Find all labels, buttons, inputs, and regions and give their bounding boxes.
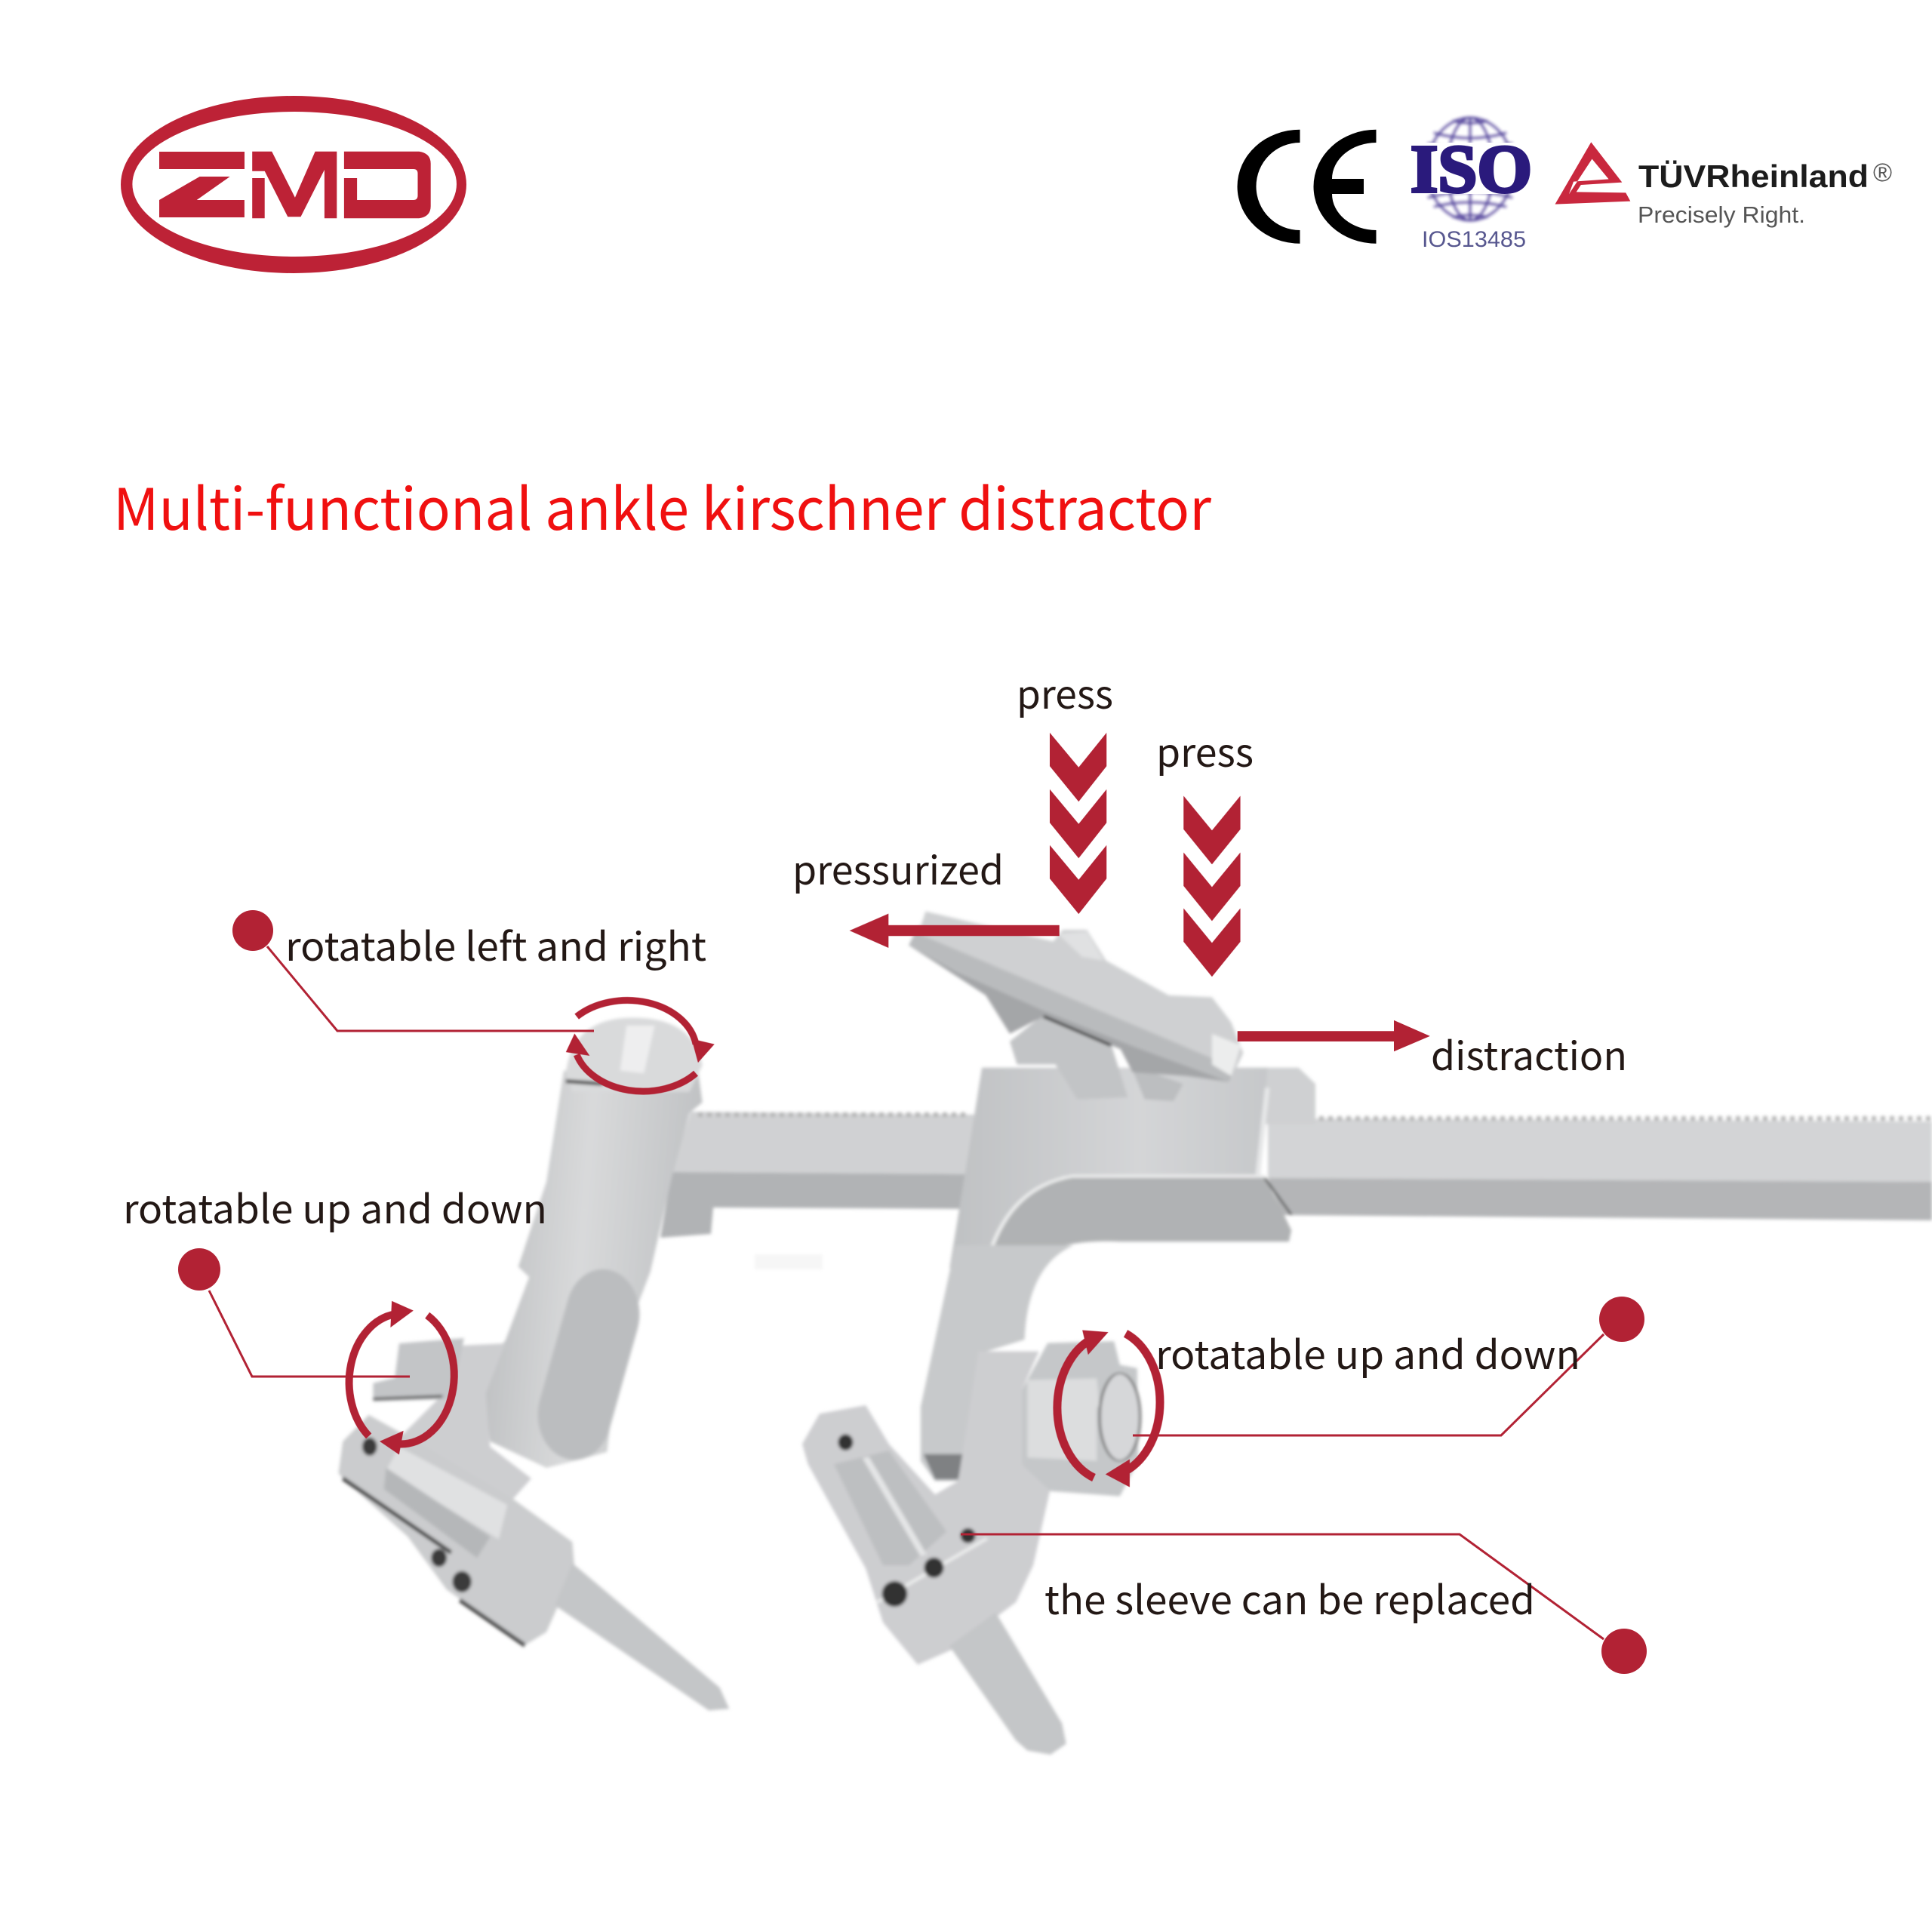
label: press (right): press — [1156, 721, 1254, 778]
label: pressurized: pressurized — [792, 839, 1004, 896]
callout: the sleeve can be replaced — [961, 1534, 1647, 1674]
rotation arrows: right knob — [1057, 1330, 1160, 1487]
press chevrons: right column — [1183, 795, 1241, 977]
slider body with arm — [949, 1068, 1315, 1268]
callout: rotatable left and right: rotatable left and right — [285, 915, 706, 972]
rotation arrows: lower left clamp — [349, 1301, 454, 1454]
left column and clamp — [338, 1017, 729, 1710]
arrow: distraction — [1238, 1020, 1430, 1051]
certification: ISO 13485: IOS13485 — [1422, 227, 1526, 252]
callout: rotatable up and down, right — [1133, 1297, 1644, 1435]
rotation arrows: top left knob — [566, 1001, 715, 1091]
callout: rotatable left and right — [232, 910, 706, 1031]
handle plate — [909, 912, 1243, 1101]
callout: rotatable up and down, left: rotatable up and down — [123, 1178, 547, 1235]
rack bar — [660, 1112, 1932, 1269]
arrow: pressurized — [850, 914, 1060, 948]
product photo: distractor device — [338, 912, 1932, 1755]
certification: ISO 13485 — [1404, 118, 1540, 252]
certification: TÜV Rheinland — [1555, 142, 1892, 228]
label: distraction: distraction — [1431, 1025, 1627, 1081]
certification: TÜV Rheinland: Precisely Right. — [1638, 202, 1805, 228]
callout: the sleeve can be replaced: the sleeve can be replaced — [1044, 1569, 1535, 1626]
press chevrons: left column — [1050, 733, 1106, 914]
logo: ZMD — [121, 96, 466, 273]
label: press (left): press — [1017, 663, 1113, 720]
certification: TÜV Rheinland: TÜVRheinland — [1638, 158, 1869, 194]
callout: rotatable up and down, right: rotatable up and down — [1155, 1324, 1580, 1380]
right arm plate and knob — [802, 1245, 1140, 1755]
certification: TÜV Rheinland: ® — [1873, 158, 1892, 187]
certification: ISO 13485: ISO — [1411, 132, 1532, 207]
callout: rotatable up and down, left — [123, 1178, 547, 1377]
certification: CE mark — [1238, 130, 1377, 244]
title: Multi-functional ankle kirschner distractor — [113, 463, 1211, 546]
